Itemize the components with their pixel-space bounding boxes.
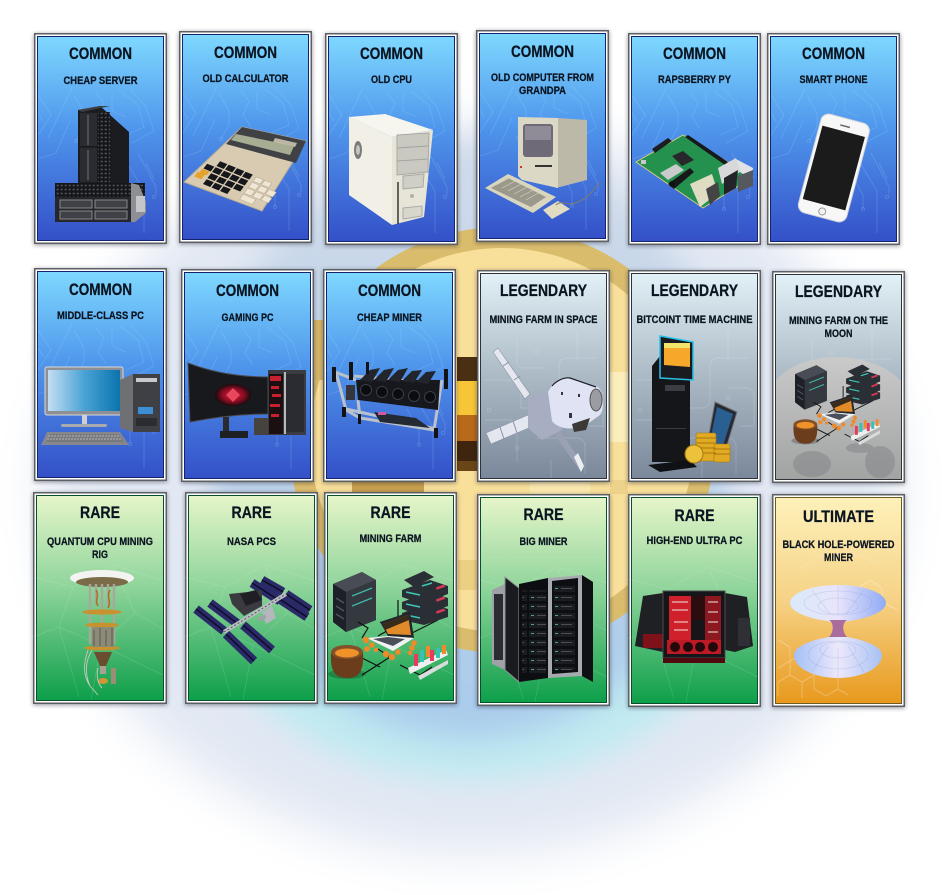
card: rare quantum cpu mining rig bbox=[33, 492, 167, 704]
icon: mining farm bbox=[791, 365, 880, 445]
icon: server cabinets bbox=[492, 575, 593, 682]
name second line: GRANDPA bbox=[519, 85, 566, 97]
name: GAMING PC bbox=[222, 312, 274, 324]
card: legendary mining farm on the moon bbox=[772, 271, 905, 483]
card: common old cpu bbox=[325, 33, 458, 245]
heading: RARE bbox=[524, 505, 564, 524]
icon: red liquid-cooled pc with side cases bbox=[635, 591, 753, 663]
icon: gaming monitor and tower bbox=[188, 363, 306, 438]
name: BLACK HOLE-POWERED bbox=[782, 539, 895, 551]
heading: RARE bbox=[370, 503, 410, 522]
hexagon pattern bbox=[778, 553, 898, 698]
icon: desktop monitor, keyboard and tower bbox=[41, 367, 160, 445]
name: BITCOINT TIME MACHINE bbox=[636, 314, 752, 326]
name second line: RIG bbox=[92, 549, 108, 561]
name: NASA PCS bbox=[227, 536, 276, 548]
card: rare high-end ultra pc bbox=[628, 494, 761, 707]
card: common cheap miner bbox=[323, 269, 456, 482]
card: common middle-class pc bbox=[34, 268, 167, 481]
card: rare nasa pcs bbox=[185, 492, 318, 704]
card: common cheap server bbox=[34, 33, 167, 244]
name second line: MOON bbox=[824, 328, 853, 340]
card: common raspberry pi bbox=[628, 33, 761, 245]
name: SMART PHONE bbox=[800, 74, 868, 86]
heading: LEGENDARY bbox=[651, 281, 739, 300]
name: MINING FARM bbox=[360, 533, 422, 545]
name: BIG MINER bbox=[520, 536, 568, 548]
heading: LEGENDARY bbox=[500, 281, 588, 300]
name: OLD CALCULATOR bbox=[202, 73, 289, 85]
name second line: MINER bbox=[824, 552, 853, 564]
card: common gaming pc bbox=[181, 269, 314, 482]
heading: COMMON bbox=[360, 44, 423, 63]
name: MINING FARM IN SPACE bbox=[490, 314, 598, 326]
name: QUANTUM CPU MINING bbox=[47, 536, 153, 548]
heading: LEGENDARY bbox=[795, 282, 883, 301]
card: common smart phone bbox=[767, 33, 900, 245]
icon: open-frame mining rig bbox=[332, 362, 448, 438]
icon: vintage computer, keyboard and mouse bbox=[485, 117, 600, 219]
name: OLD CPU bbox=[371, 74, 412, 86]
icon: black hole wormhole funnel bbox=[790, 585, 886, 678]
icon: moon surface bbox=[776, 357, 901, 479]
heading: COMMON bbox=[358, 281, 421, 300]
icon: server tower and rack bbox=[55, 106, 146, 222]
icon: spacecraft with solar panels bbox=[486, 348, 603, 472]
icon: bitcoin atm with tablet and coins bbox=[648, 336, 737, 472]
heading: COMMON bbox=[802, 44, 865, 63]
heading: COMMON bbox=[214, 43, 277, 62]
card: common old computer from grandpa bbox=[476, 30, 609, 242]
bitcoin coin behind the cards bbox=[289, 227, 715, 653]
heading: COMMON bbox=[216, 281, 279, 300]
heading: RARE bbox=[674, 506, 714, 525]
card: rare mining farm bbox=[324, 492, 457, 704]
icon: mining farm bbox=[328, 571, 448, 680]
icon: calculator bbox=[184, 127, 306, 211]
heading: ULTIMATE bbox=[803, 507, 874, 526]
icon: raspberry pi board bbox=[636, 135, 753, 208]
heading: COMMON bbox=[663, 44, 726, 63]
icon: smartphone bbox=[797, 112, 871, 224]
heading: COMMON bbox=[69, 44, 132, 63]
heading: RARE bbox=[232, 503, 272, 522]
name: CHEAP SERVER bbox=[64, 75, 138, 87]
name: HIGH-END ULTRA PC bbox=[646, 535, 743, 547]
card: legendary mining farm in space bbox=[477, 270, 610, 482]
icon: space station bbox=[196, 580, 310, 661]
name: RAPSBERRY PY bbox=[658, 74, 732, 86]
card: rare big miner bbox=[477, 494, 610, 706]
heading: COMMON bbox=[511, 42, 574, 61]
icon: quantum computer chandelier bbox=[70, 570, 134, 695]
heading: COMMON bbox=[69, 280, 132, 299]
name: MIDDLE-CLASS PC bbox=[57, 310, 144, 322]
name: CHEAP MINER bbox=[357, 312, 422, 324]
name: OLD COMPUTER FROM bbox=[491, 72, 594, 84]
page background glow bbox=[43, 125, 899, 855]
card: ultimate black hole-powered miner bbox=[772, 494, 905, 707]
card: legendary bitcoin time machine bbox=[628, 270, 761, 482]
name: MINING FARM ON THE bbox=[789, 315, 888, 327]
icon: beige desktop tower bbox=[349, 114, 433, 225]
moon craters bbox=[793, 443, 895, 478]
card: common old calculator bbox=[179, 31, 312, 243]
heading: RARE bbox=[80, 503, 120, 522]
